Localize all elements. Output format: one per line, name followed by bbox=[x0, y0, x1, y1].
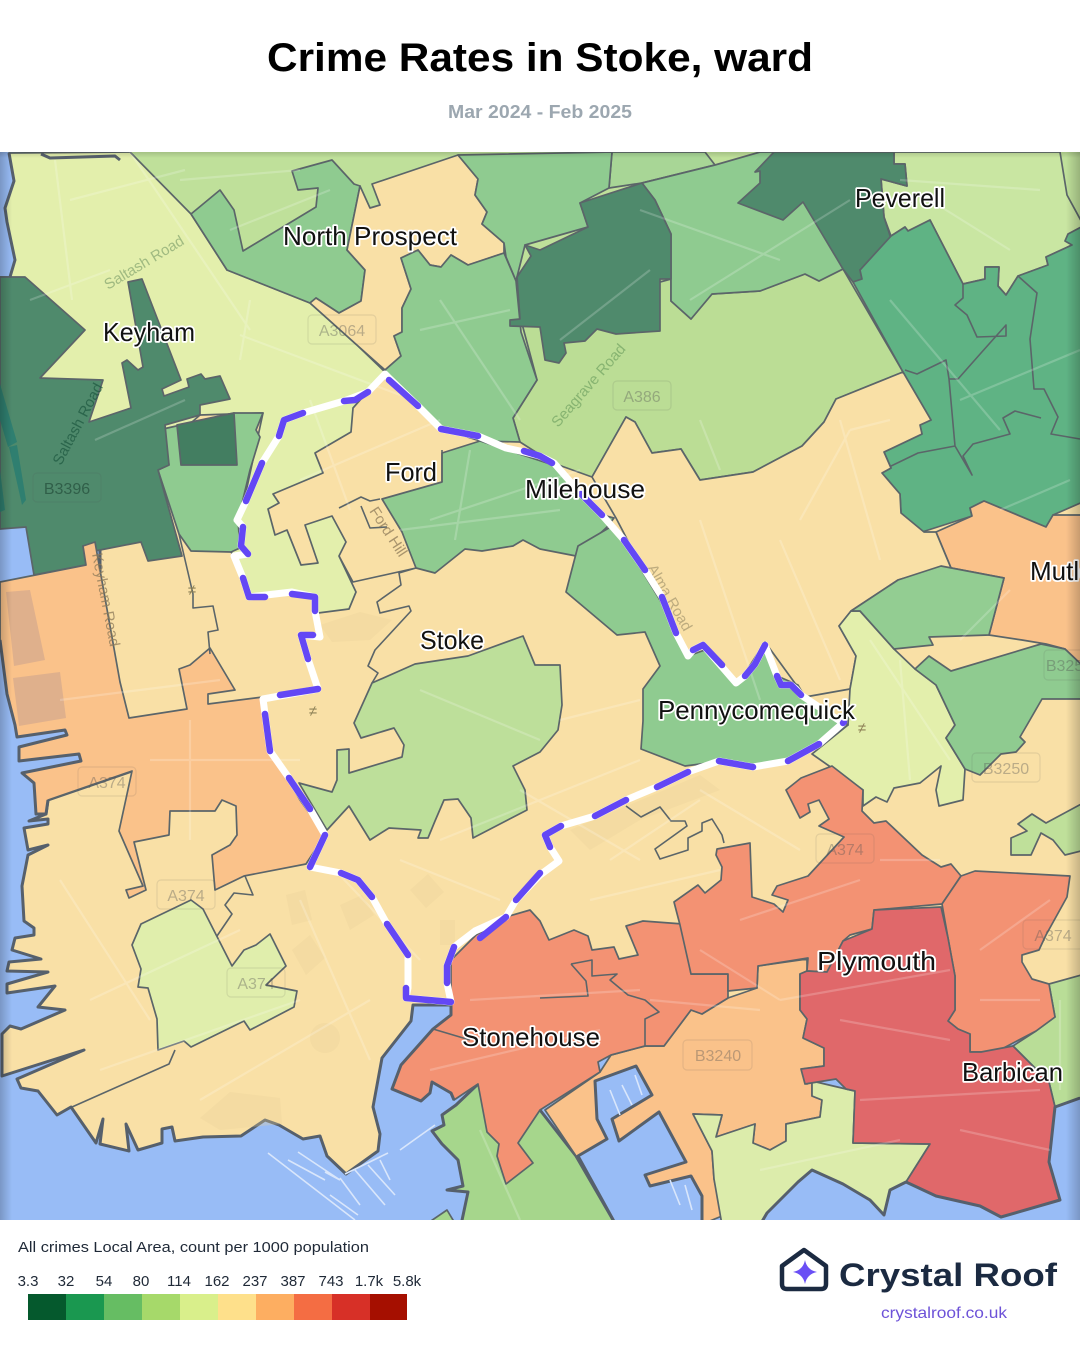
legend tick labels bbox=[18, 1273, 422, 1290]
ward boundary: Stoke bbox=[234, 374, 844, 1002]
road names: Alma Road bbox=[644, 562, 695, 634]
legend tick labels: 387 bbox=[280, 1273, 306, 1290]
region: east salmon bbox=[942, 871, 1070, 1052]
region: small green south bbox=[431, 1209, 454, 1220]
legend tick labels: 54 bbox=[96, 1273, 112, 1290]
legend tick labels: 5.8k bbox=[393, 1273, 422, 1290]
region: harbour water bbox=[578, 1066, 702, 1225]
map edge shading bbox=[0, 152, 1080, 1220]
place labels: Stonehouse bbox=[462, 1022, 600, 1052]
icon: Crystal Roof house logo bbox=[782, 1250, 826, 1289]
legend tick labels: 80 bbox=[133, 1273, 149, 1290]
tan building blocks bbox=[6, 590, 66, 726]
dock channels bbox=[0, 384, 26, 512]
region: mid green west of ward bbox=[158, 413, 263, 552]
place labels: Plymouth bbox=[817, 946, 936, 976]
road label shields: A374 bbox=[826, 842, 864, 859]
region: cream east of ward bbox=[592, 372, 951, 697]
road label shields: A386 bbox=[623, 389, 661, 406]
region: north strip light green bbox=[609, 152, 715, 188]
tan land-use patches on cream bbox=[252, 1118, 280, 1127]
legend tick labels: 1.7k bbox=[355, 1273, 384, 1290]
region: east centre pale green bbox=[812, 611, 965, 806]
place labels: Peverell bbox=[855, 183, 945, 213]
region: Milehouse green bbox=[382, 441, 614, 573]
place labels: Milehouse bbox=[525, 474, 645, 504]
place labels: Stoke bbox=[420, 625, 484, 655]
region: cream base, Stoke and Devonport bbox=[2, 370, 1080, 1174]
region: Peverell pale green bbox=[881, 152, 1080, 295]
region: small green patch east bbox=[1011, 802, 1080, 855]
road names: Saltash Road bbox=[101, 232, 187, 293]
subtitle: date range: Mar 2024 - Feb 2025 bbox=[448, 102, 632, 122]
region: ward north green bbox=[385, 250, 537, 442]
region: pale green east south bbox=[1013, 974, 1080, 1107]
legend colour scale bbox=[28, 1294, 407, 1320]
rail station marks bbox=[188, 582, 866, 737]
region: Mutley orange bbox=[936, 501, 1080, 668]
region: Stonehouse green tail background bbox=[432, 1084, 616, 1225]
region: orange west docks bbox=[0, 542, 325, 898]
legend tick labels: 162 bbox=[204, 1273, 230, 1290]
south east coast line bbox=[760, 1098, 1080, 1225]
place labels: Keyham bbox=[103, 317, 195, 347]
region: Peverell dark green bbox=[738, 152, 907, 282]
legend tick labels: 114 bbox=[167, 1273, 191, 1290]
legend tick labels: 32 bbox=[58, 1273, 74, 1290]
place labels: North Prospect bbox=[283, 221, 458, 251]
region: darkest green central north bbox=[510, 183, 671, 363]
legend title: All crimes Local Area, count per 1000 population bbox=[18, 1239, 369, 1256]
legend tick labels: 743 bbox=[318, 1273, 344, 1290]
legend tick labels: 237 bbox=[242, 1273, 268, 1290]
road names: Saltash Road bbox=[50, 380, 107, 468]
place labels: Pennycomequick bbox=[658, 695, 856, 725]
north west coast line bbox=[5, 153, 120, 277]
region: north east green bbox=[853, 220, 1080, 532]
road label shields: B3250 bbox=[983, 761, 1029, 778]
region: east green lower bbox=[915, 644, 1080, 775]
road label shields: A374 bbox=[167, 888, 205, 905]
logo wordmark: Crystal Roof bbox=[839, 1257, 1057, 1293]
region: Keyham pale green bbox=[0, 152, 385, 613]
region: darker block bbox=[177, 413, 237, 465]
place labels: Barbican bbox=[962, 1057, 1063, 1087]
road label shields: A374 bbox=[237, 976, 275, 993]
region: Stoke central green bbox=[299, 636, 562, 840]
region: north central light green bbox=[513, 269, 903, 480]
region: Pennycomequick green bbox=[566, 525, 848, 767]
road names bbox=[50, 232, 695, 648]
region: north west central green bbox=[458, 152, 612, 281]
road label shields: B3396 bbox=[44, 481, 90, 498]
region: dark green Devonport bbox=[0, 277, 230, 575]
faint road network bbox=[30, 152, 1080, 1220]
road label shields: A3064 bbox=[319, 323, 365, 340]
rail station marks: ≠ bbox=[309, 703, 317, 720]
west dock coast line bbox=[0, 640, 81, 814]
region: Devonport park pale green bbox=[132, 900, 297, 1050]
road label shields: A374 bbox=[88, 775, 126, 792]
website link: crystalroof.co.uk bbox=[881, 1305, 1008, 1322]
place labels: Ford bbox=[385, 457, 437, 487]
region: Plymouth north salmon bbox=[674, 766, 961, 991]
region: B3240 orange bbox=[545, 959, 824, 1225]
road label shields: A374 bbox=[1034, 928, 1072, 945]
rail station marks: ≠ bbox=[858, 720, 866, 737]
place labels bbox=[103, 183, 1080, 1087]
road label shields bbox=[33, 315, 1080, 1070]
road label shields: B3240 bbox=[695, 1048, 741, 1065]
road names: Keyham Road bbox=[88, 552, 123, 648]
cream boundary lines bbox=[72, 450, 724, 1107]
legend tick labels: 3.3 bbox=[18, 1273, 38, 1290]
region: Plymouth centre red bbox=[800, 907, 1060, 1217]
Stonehouse coast line bbox=[392, 1005, 454, 1101]
choropleth map bbox=[0, 152, 1080, 1225]
region: south pale green bbox=[693, 1081, 930, 1225]
region: east green upper bbox=[851, 566, 1004, 649]
region: North Prospect cream bbox=[310, 155, 504, 370]
road names: Seagrave Road bbox=[548, 341, 629, 431]
region boundaries inside north east green bbox=[887, 276, 1080, 475]
road names: Ford Hill bbox=[366, 504, 410, 560]
region: north central green bbox=[642, 152, 843, 319]
rail station marks: ≠ bbox=[188, 582, 196, 599]
title: Crime Rates in Stoke, ward bbox=[267, 36, 813, 80]
Stonehouse inner boundaries bbox=[433, 960, 659, 1046]
marina piers bbox=[268, 1075, 692, 1220]
region: North Prospect west green bbox=[191, 160, 365, 313]
region: Stonehouse salmon bbox=[392, 910, 728, 1184]
